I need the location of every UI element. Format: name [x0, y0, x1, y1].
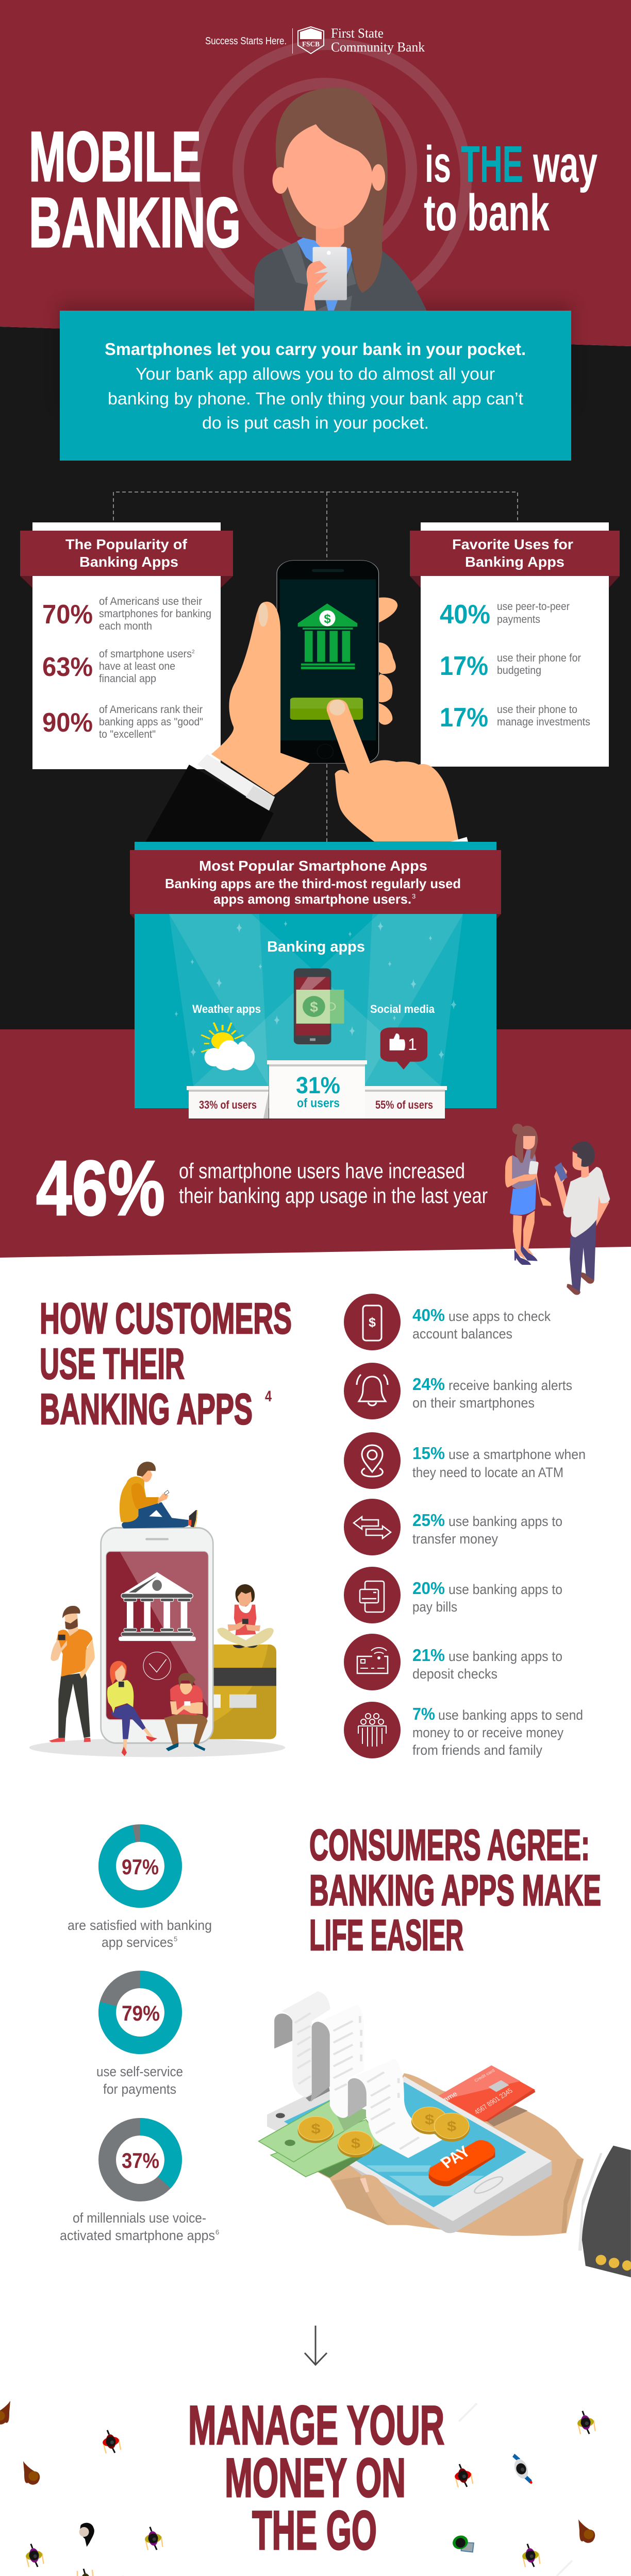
- podium: of users: [297, 1096, 340, 1110]
- item: pay bills: pay bills: [412, 1599, 457, 1615]
- panel: popularity of banking apps: of Americans use their: [99, 596, 202, 607]
- item: check balances: [344, 1294, 551, 1350]
- title: mobile banking: MOBILE: [29, 117, 201, 196]
- icon: like bubble: [380, 1027, 427, 1070]
- panel: popularity of banking apps: of Americans rank their: [99, 704, 203, 716]
- panel: popularity of banking apps: 70%: [42, 600, 93, 630]
- donut: 79 percent: for payments: [103, 2081, 176, 2097]
- stat: 46 percent: of smartphone users have increased: [179, 1159, 465, 1183]
- sparkles: [174, 921, 457, 1060]
- item: transfer: use banking apps to: [449, 1514, 562, 1529]
- item: send money to friends: 7%: [412, 1704, 435, 1723]
- bearded man standing: [49, 1606, 95, 1742]
- stat: 46 percent: [36, 1144, 488, 1231]
- item: pay bills: use banking apps to: [449, 1582, 562, 1597]
- panel: favorite uses for banking apps: Banking Apps: [465, 554, 564, 570]
- coins: $: [447, 2119, 457, 2134]
- hero rings: [195, 44, 466, 315]
- logo: header: Community Bank: [331, 40, 425, 55]
- donut: 37 percent: 37%: [122, 2148, 159, 2173]
- icon: phone with banknote: $: [310, 999, 318, 1015]
- heading: how customers use their banking apps: BANKING APPS: [40, 1385, 253, 1433]
- item: alerts: on their smartphones: [412, 1395, 535, 1411]
- panel: popularity of banking apps: smartphones for banking: [99, 608, 211, 620]
- phone with hands illustration: $: [324, 612, 331, 626]
- phone with hands illustration: [146, 561, 468, 842]
- credit card: [438, 2065, 535, 2122]
- printer: [267, 2084, 330, 2132]
- panel: favorite uses for banking apps: 17%: [440, 703, 488, 733]
- panel: popularity of banking apps: 1: [157, 597, 160, 602]
- heading: how customers use their banking apps: 4: [265, 1388, 272, 1405]
- panel: favorite uses for banking apps: 40%: [440, 600, 490, 630]
- podium: 33% of users: [199, 1098, 257, 1111]
- intro teal card: [60, 311, 571, 461]
- panel: popularity of banking apps: banking apps as "good": [99, 716, 203, 728]
- item: locate atm: they need to locate an ATM: [412, 1465, 563, 1480]
- icon: phone with banknote: [294, 969, 344, 1044]
- panel: most popular smartphone apps stage: Banking apps are the third-most regularly used: [165, 876, 461, 891]
- background: black middle band: [0, 327, 631, 1029]
- panel: most popular smartphone apps stage: 3: [412, 892, 416, 900]
- panel: favorite uses for banking apps: Favorite Uses for: [452, 536, 573, 552]
- phone body: [349, 2076, 552, 2233]
- heading: consumers agree: [309, 1821, 601, 1959]
- panel: popularity of banking apps: 2: [192, 649, 195, 655]
- tagline: is THE way to bank: THE: [461, 135, 523, 193]
- sleeve and cuff: [578, 2146, 631, 2277]
- receipt roll: [274, 1991, 443, 2158]
- panel: favorite uses for banking apps: 17%: [440, 651, 488, 681]
- panel: popularity of banking apps: of smartphone users: [99, 648, 192, 660]
- donut: 37 percent: 6: [215, 2228, 219, 2236]
- coins: [298, 2107, 470, 2158]
- illustration: hand holding phone with pay button: [259, 1991, 631, 2277]
- tagline: is THE way to bank: [424, 135, 597, 242]
- podium: 31%: [296, 1072, 340, 1098]
- coins: $: [425, 2112, 435, 2127]
- credit card: 4567 8901 2345: [473, 2087, 514, 2116]
- panel: popularity of banking apps: each month: [99, 620, 152, 632]
- intro teal card: banking by phone. The only thing your bank app can’t: [108, 389, 523, 408]
- item: locate atm: [344, 1432, 586, 1489]
- item: check balances: use apps to check: [449, 1309, 551, 1324]
- panel: popularity of banking apps: financial app: [99, 673, 156, 685]
- donut: 97 percent: [68, 1833, 212, 1950]
- item: send money to friends: [344, 1702, 583, 1758]
- donut stats: [60, 1833, 219, 2243]
- crowd pattern of people: [0, 2401, 631, 2576]
- panel: most popular smartphone apps stage: Banking apps: [267, 939, 365, 955]
- item: transfer: transfer money: [412, 1531, 498, 1547]
- panel: popularity of banking apps: The Popularity of: [65, 536, 188, 552]
- man sitting on phone: [120, 1462, 197, 1529]
- donut: 37 percent: [60, 2127, 219, 2243]
- donut: 79 percent: 79%: [122, 2001, 160, 2025]
- icon: sun and cloud: [201, 1023, 255, 1071]
- panel: popularity of banking apps: to "excellent": [99, 728, 156, 740]
- panel: most popular smartphone apps stage: Weather apps: [192, 1003, 261, 1015]
- item: alerts: [344, 1363, 572, 1419]
- podium: [187, 1060, 447, 1120]
- podium: 55% of users: [375, 1098, 433, 1111]
- panel: favorite uses for banking apps: manage investments: [497, 716, 590, 728]
- panel: favorite uses for banking apps: payments: [497, 614, 540, 625]
- item: alerts: 24%: [412, 1375, 445, 1394]
- panel: most popular smartphone apps stage: apps among smartphone users.: [213, 891, 411, 907]
- icon: like bubble: 1: [408, 1035, 417, 1054]
- item: locate atm: 15%: [412, 1444, 445, 1463]
- title: mobile banking: BANKING: [29, 183, 241, 262]
- panel: popularity of banking apps: [20, 522, 233, 769]
- credit card: [206, 1645, 276, 1739]
- item: deposit checks: use banking apps to: [449, 1649, 562, 1664]
- panel: most popular smartphone apps stage: Most Popular Smartphone Apps: [199, 858, 427, 874]
- dashed connector lines: [113, 492, 518, 842]
- banknotes: [259, 2101, 384, 2178]
- item: check balances: $: [369, 1315, 376, 1330]
- stat: 46 percent: 46%: [36, 1144, 165, 1231]
- donut: 97 percent: are satisfied with banking: [68, 1918, 212, 1933]
- credit card: ame: [442, 2090, 459, 2103]
- panel: popularity of banking apps: Banking Apps: [79, 554, 178, 570]
- panel: most popular smartphone apps stage: [130, 842, 501, 1120]
- giant phone: [101, 1528, 213, 1743]
- credit card: Credit card: [473, 2068, 496, 2083]
- background: maroon lower band: [0, 1029, 631, 1258]
- item: send money to friends: use banking apps to send: [438, 1707, 583, 1723]
- logo: header: FSCB: [302, 41, 320, 48]
- intro teal card: do is put cash in your pocket.: [202, 413, 429, 432]
- tagline: is THE way to bank: to bank: [424, 184, 550, 242]
- woman with phone illustration: [254, 87, 426, 311]
- background: maroon top band: [0, 0, 631, 346]
- item: send money to friends: from friends and family: [412, 1742, 542, 1758]
- item: check balances: account balances: [412, 1326, 512, 1342]
- donut: 37 percent: of millennials use voice-: [73, 2210, 206, 2226]
- coins: $: [311, 2122, 321, 2137]
- item: deposit checks: deposit checks: [412, 1666, 497, 1682]
- heading: manage your money on the go: MONEY ON: [225, 2447, 406, 2509]
- donut: 97 percent: app services: [102, 1935, 173, 1950]
- tagline: is THE way to bank: way: [533, 135, 597, 193]
- box shadow behind teal card: [60, 304, 571, 407]
- seated man in red shirt: [164, 1673, 208, 1751]
- spotlights: [169, 914, 463, 1086]
- heading: manage your money on the go: MANAGE YOUR: [188, 2394, 444, 2456]
- seated woman with red hair: [107, 1661, 157, 1756]
- logo: header: [205, 26, 425, 55]
- logo: header: Success Starts Here.: [205, 36, 287, 47]
- item: transfer: [344, 1499, 562, 1555]
- panel: favorite uses for banking apps: use peer-to-peer: [497, 601, 570, 613]
- item: send money to friends: money to or receive money: [412, 1725, 563, 1740]
- coins: $: [351, 2136, 360, 2151]
- donut: 37 percent: activated smartphone apps: [60, 2228, 215, 2243]
- logo: header: First State: [331, 26, 384, 41]
- panel: most popular smartphone apps stage: Social media: [370, 1003, 435, 1015]
- donut: 97 percent: 97%: [122, 1855, 159, 1879]
- illustration: people around giant phone: [29, 1462, 285, 1757]
- arrow: down: [305, 2326, 327, 2365]
- panel: favorite uses for banking apps: use their phone for: [497, 652, 581, 664]
- heading: how customers use their banking apps: [40, 1294, 292, 1433]
- item: pay bills: 20%: [412, 1579, 445, 1598]
- item: deposit checks: 21%: [412, 1646, 445, 1665]
- donut: 79 percent: [96, 1979, 183, 2097]
- heading: how customers use their banking apps: USE THEIR: [40, 1340, 185, 1388]
- illustration: two people with phones: [505, 1124, 610, 1295]
- item: transfer: 25%: [412, 1511, 445, 1530]
- intro teal card: Your bank app allows you to do almost all your: [136, 364, 495, 383]
- item: pay bills: [344, 1567, 562, 1623]
- heading: manage your money on the go: [188, 2394, 444, 2561]
- panel: favorite uses for banking apps: budgeting: [497, 665, 541, 676]
- heading: manage your money on the go: THE GO: [252, 2499, 377, 2561]
- panel: popularity of banking apps: 90%: [42, 708, 93, 738]
- title: mobile banking: [29, 117, 241, 262]
- panel: favorite uses for banking apps: use their phone to: [497, 704, 577, 716]
- cross-legged woman on card: [218, 1584, 274, 1648]
- intro teal card: Smartphones let you carry your bank in your pocket.: [105, 340, 526, 359]
- panel: popularity of banking apps: have at least one: [99, 660, 175, 672]
- panel: favorite uses for banking apps: [410, 522, 620, 767]
- item: alerts: receive banking alerts: [449, 1378, 572, 1393]
- item: locate atm: use a smartphone when: [449, 1447, 586, 1462]
- donut: 97 percent: 5: [174, 1935, 177, 1943]
- list: how customers use apps: [344, 1294, 586, 1758]
- item: deposit checks: [344, 1634, 562, 1690]
- stat: 46 percent: their banking app usage in the last year: [179, 1183, 488, 1208]
- tagline: is THE way to bank: is: [425, 135, 451, 193]
- panel: popularity of banking apps: 63%: [42, 652, 93, 682]
- pay button: [429, 2140, 495, 2186]
- donut: 79 percent: use self-service: [96, 2064, 183, 2079]
- heading: how customers use their banking apps: HOW CUSTOMERS: [40, 1294, 292, 1343]
- heading: consumers agree: LIFE EASIER: [309, 1911, 463, 1959]
- pay button: PAY: [437, 2143, 474, 2172]
- item: check balances: 40%: [412, 1306, 445, 1325]
